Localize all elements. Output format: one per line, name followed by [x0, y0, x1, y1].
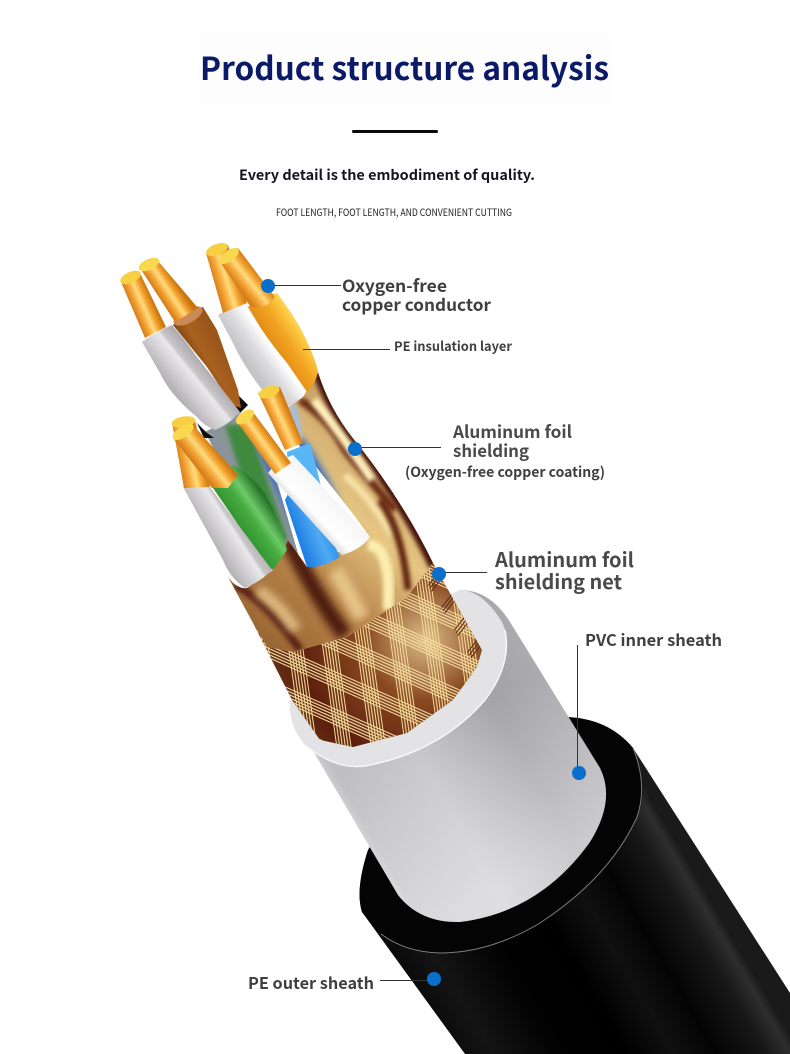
conductor: lower wires	[170, 383, 303, 488]
PVC inner sheath	[290, 590, 606, 922]
subtitle: Every detail is the embodiment of quality.	[239, 165, 535, 185]
title rule	[352, 130, 438, 133]
wire: orange	[248, 293, 318, 392]
wire: grey left	[142, 325, 240, 430]
callout: oxygen-free copper conductor: copper conductor	[342, 291, 492, 316]
conductor: right pair	[204, 240, 275, 313]
interior shadow spots	[197, 393, 248, 438]
conductor: left pair	[118, 255, 198, 338]
callout: aluminum foil shielding	[348, 418, 605, 482]
wire: white lower	[268, 455, 370, 555]
callout: PVC inner sheath: PVC inner sheath	[585, 627, 722, 651]
header block	[198, 35, 612, 219]
callout: aluminum foil shielding net: Aluminum foil	[494, 544, 634, 573]
callout: aluminum foil shielding: (Oxygen-free copper coating)	[405, 462, 605, 482]
callout: aluminum foil shielding net	[432, 544, 634, 595]
wire: green	[213, 465, 287, 570]
callout: oxygen-free copper conductor: Oxygen-free	[342, 272, 447, 297]
callout: PVC inner sheath	[572, 627, 722, 780]
wire: white right	[218, 303, 305, 407]
outer sheath end face	[360, 717, 643, 954]
outer sheath rim highlight	[381, 748, 642, 953]
wire: grey lower	[183, 487, 272, 588]
callout: PE insulation layer: PE insulation layer	[394, 336, 512, 355]
foil streaks	[235, 372, 436, 650]
interior left band behind wires	[205, 413, 300, 570]
wire: brown	[171, 302, 241, 408]
PE outer sheath body	[360, 717, 790, 1054]
aluminum foil shielding net	[253, 563, 482, 747]
caption: FOOT LENGTH, FOOT LENGTH, AND CONVENIENT CUTTING	[276, 204, 512, 219]
callout: PE outer sheath	[248, 970, 441, 994]
callout: oxygen-free copper conductor	[261, 272, 492, 316]
callout: aluminum foil shielding net: shielding net	[495, 566, 623, 595]
title: Product structure analysis	[200, 44, 609, 90]
aluminum foil shielding	[228, 372, 436, 652]
callout: aluminum foil shielding: shielding	[453, 437, 529, 462]
cable illustration	[118, 240, 790, 1054]
callout: aluminum foil shielding: Aluminum foil	[452, 418, 572, 443]
wire: blue	[285, 443, 340, 567]
interior colour blur	[223, 422, 296, 548]
callout: PE outer sheath: PE outer sheath	[248, 970, 374, 994]
sheath rim	[290, 590, 507, 767]
